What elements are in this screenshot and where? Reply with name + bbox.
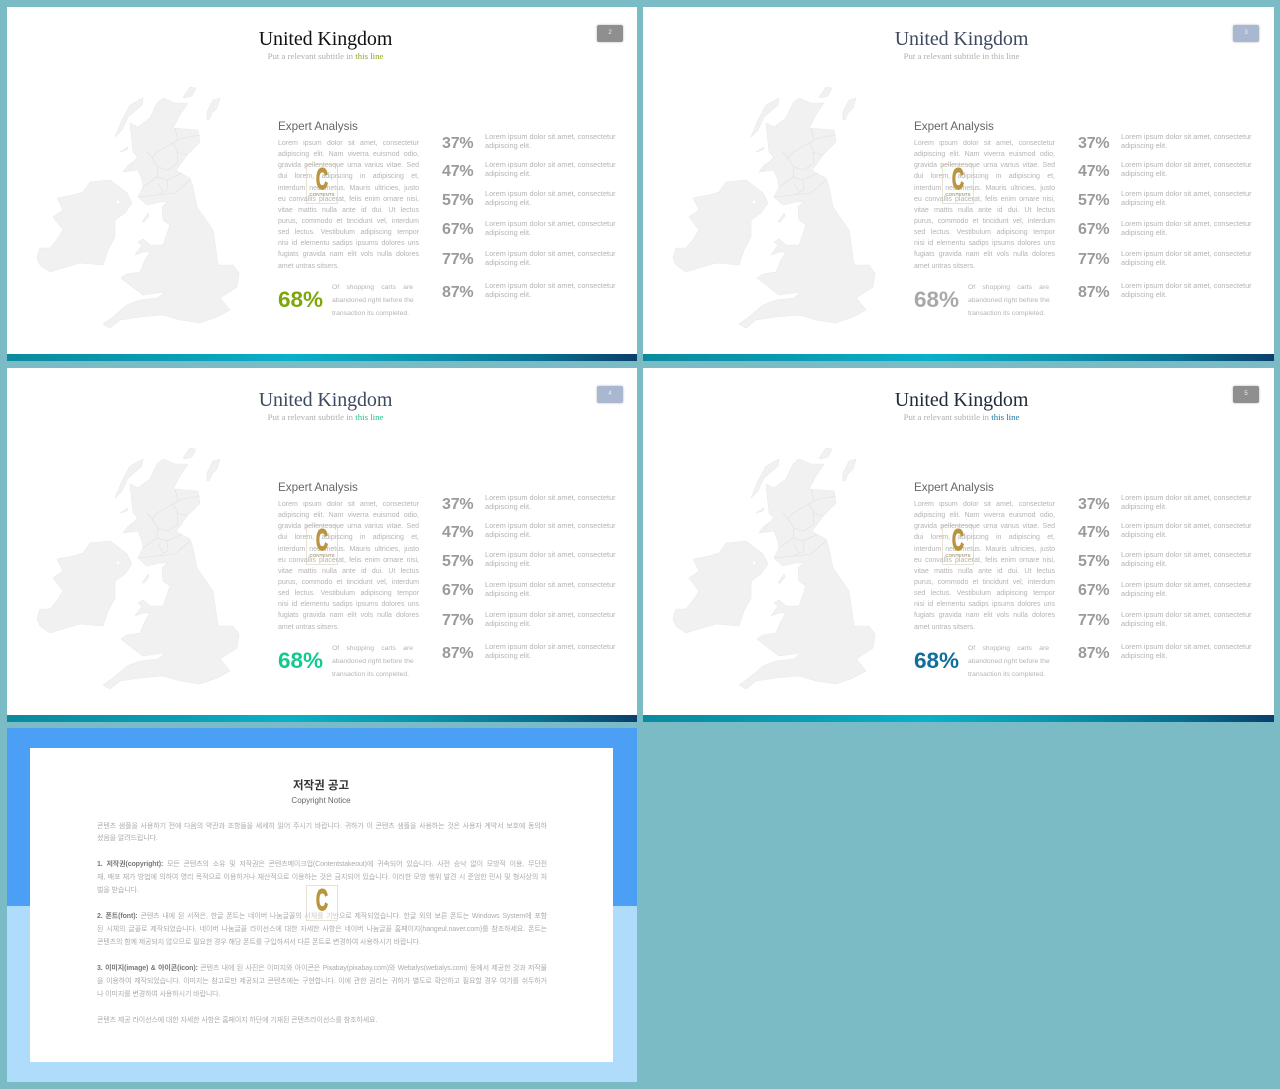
- map of United Kingdom and Ireland: [36, 86, 240, 328]
- stat 47%: 47%: [442, 163, 473, 180]
- key stat 68%: 68%: [914, 648, 959, 673]
- stat 67% text: Lorem ipsum dolor sit amet, consectetur: [1121, 580, 1252, 589]
- paragraph: purus, commodo et tincidunt vel, interdum: [914, 579, 1055, 586]
- notice subtitle: Copyright Notice: [291, 796, 351, 805]
- key stat caption: abandoned right before the: [968, 658, 1050, 665]
- paragraph: purus, commodo et tincidunt vel, interdum: [914, 218, 1055, 225]
- paragraph: nisi id elementu sadips ipsums dolores uns: [278, 240, 419, 247]
- stat 37%: 37%: [1078, 135, 1109, 152]
- stat 67% text: adipiscing elit.: [1121, 589, 1167, 598]
- section 2 font: 2. 폰트(font): 콘텐츠 내에 된 서적은, 한글 폰트는 네이버 나눔글꼴의 서체를 기반으로 제작되었습니다. 한글 외의 보른 폰트는 Windows System에 포함: [97, 913, 547, 920]
- stat 37%: 37%: [1078, 496, 1109, 513]
- stat 87% text: Lorem ipsum dolor sit amet, consectetur: [485, 642, 616, 651]
- panel: slide 4: [7, 368, 637, 722]
- key stat caption: transaction its completed.: [332, 671, 409, 678]
- paragraph: dui lorem, adipiscing in adipiscing et,: [914, 173, 1055, 180]
- key stat caption: Of shopping carts are: [332, 284, 413, 291]
- paragraph: Lorem ipsum dolor sit amet, consectetur: [914, 140, 1055, 147]
- stat 87%: 87%: [1078, 645, 1109, 662]
- paragraph: vitae mattis nulla ante id dui. Ut lectus: [914, 568, 1055, 575]
- section 1 copyright: 재, 배포 재가 방법에 의하여 영리 목적으로 이용하거나 재산적으로 이용하는 것은 금지되어 있습니다. 이러한 모방 행위 발견 시 준엄한 민사 및 형사상의 처: [97, 874, 547, 881]
- paragraph: eu convallis placerat, felis enim ornare nisi,: [278, 557, 419, 564]
- paragraph: amet untras sitsers.: [914, 263, 975, 270]
- paragraph: amet untras sitsers.: [278, 624, 339, 631]
- stat 37% text: [1121, 493, 1252, 511]
- stat 57% text: adipiscing elit.: [485, 559, 531, 568]
- watermark logo: C: [316, 524, 328, 557]
- key stat caption: abandoned right before the: [332, 658, 414, 665]
- paragraph: Lorem ipsum dolor sit amet, consectetur: [278, 501, 419, 508]
- paragraph: [914, 140, 1055, 270]
- paragraph: Lorem ipsum dolor sit amet, consectetur: [278, 140, 419, 147]
- subtitle: Put a relevant subtitle in this line: [268, 412, 383, 422]
- stat 37% text: Lorem ipsum dolor sit amet, consectetur: [485, 132, 616, 141]
- key stat caption: transaction its completed.: [332, 310, 409, 317]
- stat 37% text: [485, 493, 616, 511]
- paragraph: interdum nec metus. Mauris ultricies, justo: [278, 185, 419, 192]
- paragraph: fugiats gravida nam elit vols nulla dolores: [914, 612, 1055, 619]
- heading: expert analysis: Expert Analysis: [278, 120, 358, 133]
- intro text: 셨음을 알려드립니다.: [97, 835, 158, 842]
- stat 87% text: Lorem ipsum dolor sit amet, consectetur: [485, 281, 616, 290]
- stat 67%: 67%: [442, 582, 473, 599]
- stat 47%: 47%: [1078, 163, 1109, 180]
- stat 57% text: Lorem ipsum dolor sit amet, consectetur: [485, 189, 616, 198]
- stat 67% text: [1121, 219, 1252, 237]
- title: United Kingdom: [259, 388, 392, 410]
- page number badge: [597, 386, 623, 403]
- paragraph: nisi id elementu sadips ipsums dolores uns: [278, 601, 419, 608]
- key stat caption: abandoned right before the: [332, 297, 414, 304]
- stat 57% text: [1121, 550, 1252, 568]
- watermark logo: CONTENTS: [309, 192, 335, 197]
- stat 77% text: [1121, 249, 1252, 267]
- heading: expert analysis: Expert Analysis: [278, 481, 358, 494]
- stat 57%: 57%: [442, 553, 473, 570]
- key stat caption: abandoned right before the: [968, 297, 1050, 304]
- paragraph: amet untras sitsers.: [278, 263, 339, 270]
- stat 77%: 77%: [442, 251, 473, 268]
- panel: slide 2: [7, 7, 637, 361]
- paragraph: adipiscing elit. Nam viverra euismod odio,: [278, 151, 419, 158]
- stat 67% text: adipiscing elit.: [485, 589, 531, 598]
- map of United Kingdom and Ireland: [672, 448, 876, 689]
- stat 67% text: [485, 580, 616, 598]
- gradient footer bar: [643, 354, 1274, 361]
- page number badge: 3: [1244, 30, 1248, 36]
- paragraph: gravida pellentesque urna varius vitae. Sed: [914, 162, 1055, 169]
- map of United Kingdom and Ireland: [36, 448, 240, 689]
- page number badge: [1233, 25, 1259, 42]
- key stat 68%: 68%: [278, 287, 323, 312]
- watermark logo: [306, 525, 338, 565]
- paragraph: nisi id elementu sadips ipsums dolores uns: [914, 601, 1055, 608]
- stat 77% text: adipiscing elit.: [485, 258, 531, 267]
- watermark logo: [942, 525, 974, 565]
- page number badge: [597, 25, 623, 42]
- stat 57%: 57%: [1078, 192, 1109, 209]
- section 3 image and icon: 나 이미지를 변경하여 사용하시기 바랍니다.: [97, 991, 220, 998]
- gradient footer bar: [7, 715, 637, 722]
- stat 87% text: adipiscing elit.: [485, 290, 531, 299]
- intro text: [97, 822, 547, 842]
- stat 87%: 87%: [442, 284, 473, 301]
- paragraph: fugiats gravida nam elit vols nulla dolores: [278, 251, 419, 258]
- paragraph: sed lectus. Vestibulum adipiscing tempor: [278, 229, 419, 236]
- paragraph: interdum nec metus. Mauris ultricies, justo: [278, 546, 419, 553]
- watermark logo: CONTENTS: [309, 553, 335, 558]
- paragraph: purus, commodo et tincidunt vel, interdum: [278, 579, 419, 586]
- subtitle: Put a relevant subtitle in this line: [904, 51, 1019, 61]
- section 1 copyright: 1. 저작권(copyright): 모든 콘텐츠의 소유 및 저작권은 콘텐츠메이크업(Contentstakeout)에 귀속되어 있습니다. 사전 승낙 없이 모방적 이용, 무단전: [97, 861, 547, 868]
- stat 67% text: Lorem ipsum dolor sit amet, consectetur: [485, 580, 616, 589]
- gradient footer bar: [7, 354, 637, 361]
- watermark logo: C: [316, 163, 328, 196]
- paragraph: gravida pellentesque urna varius vitae. Sed: [278, 162, 419, 169]
- stat 67% text: Lorem ipsum dolor sit amet, consectetur: [1121, 219, 1252, 228]
- section 3 image and icon: 을 이용하여 제작되었습니다. 이미지는 참고로만 제공되고 콘텐츠에는 구현합니다. 이에 관한 권리는 귀하가 별도로 확인하고 필요할 경우 여기를 쉬두하거: [97, 978, 547, 985]
- stat 67%: 67%: [1078, 582, 1109, 599]
- stat 37% text: Lorem ipsum dolor sit amet, consectetur: [485, 493, 616, 502]
- stat 67%: 67%: [442, 221, 473, 238]
- key stat caption: [332, 284, 414, 317]
- paragraph: interdum nec metus. Mauris ultricies, justo: [914, 546, 1055, 553]
- map of United Kingdom and Ireland: [672, 86, 876, 328]
- stat 77% text: [1121, 610, 1252, 628]
- page number badge: 4: [608, 391, 612, 397]
- paragraph: fugiats gravida nam elit vols nulla dolores: [914, 251, 1055, 258]
- stat 37% text: Lorem ipsum dolor sit amet, consectetur: [1121, 493, 1252, 502]
- key stat caption: transaction its completed.: [968, 671, 1045, 678]
- title: United Kingdom: [895, 388, 1028, 410]
- stat 77% text: adipiscing elit.: [1121, 258, 1167, 267]
- paragraph: sed lectus. Vestibulum adipiscing tempor: [914, 590, 1055, 597]
- stat 47%: 47%: [1078, 524, 1109, 541]
- stat 47% text: adipiscing elit.: [485, 530, 531, 539]
- watermark logo: CONTENTS: [945, 192, 971, 197]
- stat 37%: 37%: [442, 135, 473, 152]
- section 2 font: 콘텐츠의 함께 제공되지 않으므로 필요한 경우 해당 폰트를 구입하셔서 다른 폰트로 변경하여 사용하시기 바랍니다.: [97, 939, 421, 946]
- paragraph: Lorem ipsum dolor sit amet, consectetur: [914, 501, 1055, 508]
- stat 67% text: [485, 219, 616, 237]
- stat 87% text: adipiscing elit.: [485, 651, 531, 660]
- stat 47% text: Lorem ipsum dolor sit amet, consectetur: [1121, 160, 1252, 169]
- stat 57%: 57%: [1078, 553, 1109, 570]
- section 2 font: 된 시체의 글꼴로 제작되었습니다. 네이버 나눔글꼴 라이선스에 대한 자세한 사항은 네이버 나눔글꼴 홈페이지(hangeul.naver.com)를 참조하세요. 폰트는: [97, 926, 547, 933]
- paragraph: purus, commodo et tincidunt vel, interdum: [278, 218, 419, 225]
- page number badge: 2: [608, 30, 612, 36]
- paragraph: amet untras sitsers.: [914, 624, 975, 631]
- stat 77% text: Lorem ipsum dolor sit amet, consectetur: [1121, 610, 1252, 619]
- stat 67% text: [1121, 580, 1252, 598]
- paragraph: fugiats gravida nam elit vols nulla dolores: [278, 612, 419, 619]
- paragraph: sed lectus. Vestibulum adipiscing tempor: [278, 590, 419, 597]
- stat 37% text: adipiscing elit.: [1121, 141, 1167, 150]
- key stat caption: Of shopping carts are: [968, 645, 1049, 652]
- stat 47% text: Lorem ipsum dolor sit amet, consectetur: [485, 160, 616, 169]
- section 3 image and icon: 3. 이미지(image) & 아이콘(icon): 콘텐츠 내에 된 사진은 이미지와 아이콘은 Pixabay(pixabay.com)와 Webalys(webalys.com) 등에서 제공한 것과 저작물: [97, 965, 547, 972]
- watermark logo: [306, 164, 338, 204]
- stat 47% text: [485, 521, 616, 539]
- stat 67% text: adipiscing elit.: [1121, 228, 1167, 237]
- paragraph: adipiscing elit. Nam viverra euismod odio,: [914, 151, 1055, 158]
- panel: slide 3: [643, 7, 1274, 361]
- notice title: 저작권 공고: [293, 780, 349, 792]
- stat 37% text: adipiscing elit.: [1121, 502, 1167, 511]
- key stat caption: Of shopping carts are: [332, 645, 413, 652]
- stat 47% text: adipiscing elit.: [1121, 169, 1167, 178]
- stat 87% text: [1121, 281, 1252, 299]
- paragraph: sed lectus. Vestibulum adipiscing tempor: [914, 229, 1055, 236]
- stat 67% text: Lorem ipsum dolor sit amet, consectetur: [485, 219, 616, 228]
- section 1 copyright: [7, 729, 637, 1029]
- watermark logo: [942, 164, 974, 204]
- section 2 font: [7, 729, 637, 1029]
- watermark logo: C: [952, 524, 964, 557]
- watermark logo: CONTENTS: [945, 553, 971, 558]
- intro text: 콘텐츠 샘플을 사용하기 전에 다음의 약관과 조항들을 세세히 읽어 주시기 바랍니다. 귀하가 이 콘텐츠 샘플을 사용하는 것은 사용자 계약서 보호에 동의하: [97, 823, 547, 830]
- stat 47% text: Lorem ipsum dolor sit amet, consectetur: [485, 521, 616, 530]
- stat 57% text: Lorem ipsum dolor sit amet, consectetur: [1121, 550, 1252, 559]
- stat 57% text: adipiscing elit.: [1121, 559, 1167, 568]
- stat 87% text: [485, 642, 616, 660]
- stat 77%: 77%: [442, 612, 473, 629]
- stat 37% text: [1121, 132, 1252, 150]
- stat 57% text: Lorem ipsum dolor sit amet, consectetur: [485, 550, 616, 559]
- stat 77% text: Lorem ipsum dolor sit amet, consectetur: [485, 610, 616, 619]
- stat 67% text: adipiscing elit.: [485, 228, 531, 237]
- stat 87% text: [485, 281, 616, 299]
- stat 87% text: adipiscing elit.: [1121, 651, 1167, 660]
- stat 67%: 67%: [1078, 221, 1109, 238]
- stat 47% text: adipiscing elit.: [1121, 530, 1167, 539]
- paragraph: vitae mattis nulla ante id dui. Ut lectus: [278, 207, 419, 214]
- stat 47% text: [1121, 160, 1252, 178]
- page number badge: [1233, 386, 1259, 403]
- white notice card: [30, 748, 613, 1062]
- title: United Kingdom: [895, 28, 1028, 50]
- stat 47% text: adipiscing elit.: [485, 169, 531, 178]
- stat 37% text: Lorem ipsum dolor sit amet, consectetur: [1121, 132, 1252, 141]
- stat 77%: 77%: [1078, 251, 1109, 268]
- stat 47% text: [1121, 521, 1252, 539]
- paragraph: [914, 501, 1055, 631]
- paragraph: [278, 501, 419, 631]
- stat 57% text: [1121, 189, 1252, 207]
- subtitle: Put a relevant subtitle in this line: [904, 412, 1019, 422]
- key stat caption: [968, 645, 1050, 678]
- paragraph: dui lorem, adipiscing in adipiscing et,: [278, 534, 419, 541]
- paragraph: eu convallis placerat, felis enim ornare nisi,: [914, 557, 1055, 564]
- stat 77% text: Lorem ipsum dolor sit amet, consectetur: [485, 249, 616, 258]
- stat 57% text: [485, 550, 616, 568]
- paragraph: gravida pellentesque urna varius vitae. Sed: [914, 523, 1055, 530]
- stat 87% text: Lorem ipsum dolor sit amet, consectetur: [1121, 642, 1252, 651]
- stat 37%: 37%: [442, 496, 473, 513]
- title: United Kingdom: [259, 28, 392, 50]
- stat 77% text: [485, 610, 616, 628]
- stat 77% text: Lorem ipsum dolor sit amet, consectetur: [1121, 249, 1252, 258]
- stat 87% text: [1121, 642, 1252, 660]
- watermark logo: C: [316, 884, 328, 917]
- watermark logo: [306, 885, 338, 921]
- stat 37% text: adipiscing elit.: [485, 141, 531, 150]
- key stat caption: Of shopping carts are: [968, 284, 1049, 291]
- key stat caption: [968, 284, 1050, 317]
- stat 57% text: [485, 189, 616, 207]
- paragraph: nisi id elementu sadips ipsums dolores uns: [914, 240, 1055, 247]
- stat 57% text: adipiscing elit.: [485, 198, 531, 207]
- key stat 68%: 68%: [278, 648, 323, 673]
- gradient footer bar: [643, 715, 1274, 722]
- stat 77%: 77%: [1078, 612, 1109, 629]
- page number badge: 5: [1244, 391, 1248, 397]
- paragraph: adipiscing elit. Nam viverra euismod odio,: [914, 512, 1055, 519]
- paragraph: vitae mattis nulla ante id dui. Ut lectus: [278, 568, 419, 575]
- stat 47% text: Lorem ipsum dolor sit amet, consectetur: [1121, 521, 1252, 530]
- watermark logo: C: [952, 163, 964, 196]
- stat 87% text: adipiscing elit.: [1121, 290, 1167, 299]
- paragraph: gravida pellentesque urna varius vitae. Sed: [278, 523, 419, 530]
- panel: copyright notice slide: [7, 728, 637, 1082]
- stat 57% text: Lorem ipsum dolor sit amet, consectetur: [1121, 189, 1252, 198]
- paragraph: eu convallis placerat, felis enim ornare nisi,: [914, 196, 1055, 203]
- section 3 image and icon: [7, 729, 637, 1029]
- paragraph: adipiscing elit. Nam viverra euismod odio,: [278, 512, 419, 519]
- heading: expert analysis: Expert Analysis: [914, 481, 994, 494]
- section 1 copyright: 벌을 받습니다.: [97, 887, 139, 894]
- paragraph: eu convallis placerat, felis enim ornare nisi,: [278, 196, 419, 203]
- heading: expert analysis: Expert Analysis: [914, 120, 994, 133]
- stat 77% text: adipiscing elit.: [485, 619, 531, 628]
- paragraph: [278, 140, 419, 270]
- paragraph: interdum nec metus. Mauris ultricies, justo: [914, 185, 1055, 192]
- stat 57%: 57%: [442, 192, 473, 209]
- paragraph: vitae mattis nulla ante id dui. Ut lectus: [914, 207, 1055, 214]
- stat 87%: 87%: [442, 645, 473, 662]
- stat 87% text: Lorem ipsum dolor sit amet, consectetur: [1121, 281, 1252, 290]
- closing note: 콘텐츠 제공 라이선스에 대한 자세한 사항은 홈페이지 하단에 기재된 콘텐츠라이선스를 참조하세요.: [97, 1017, 377, 1024]
- panel: slide 5: [643, 368, 1274, 722]
- stat 87%: 87%: [1078, 284, 1109, 301]
- stat 77% text: adipiscing elit.: [1121, 619, 1167, 628]
- subtitle: Put a relevant subtitle in this line: [268, 51, 383, 61]
- paragraph: dui lorem, adipiscing in adipiscing et,: [278, 173, 419, 180]
- stat 57% text: adipiscing elit.: [1121, 198, 1167, 207]
- stat 37% text: [485, 132, 616, 150]
- stat 47% text: [485, 160, 616, 178]
- stat 37% text: adipiscing elit.: [485, 502, 531, 511]
- stat 77% text: [485, 249, 616, 267]
- stat 47%: 47%: [442, 524, 473, 541]
- key stat caption: [332, 645, 414, 678]
- paragraph: dui lorem, adipiscing in adipiscing et,: [914, 534, 1055, 541]
- key stat 68%: 68%: [914, 287, 959, 312]
- key stat caption: transaction its completed.: [968, 310, 1045, 317]
